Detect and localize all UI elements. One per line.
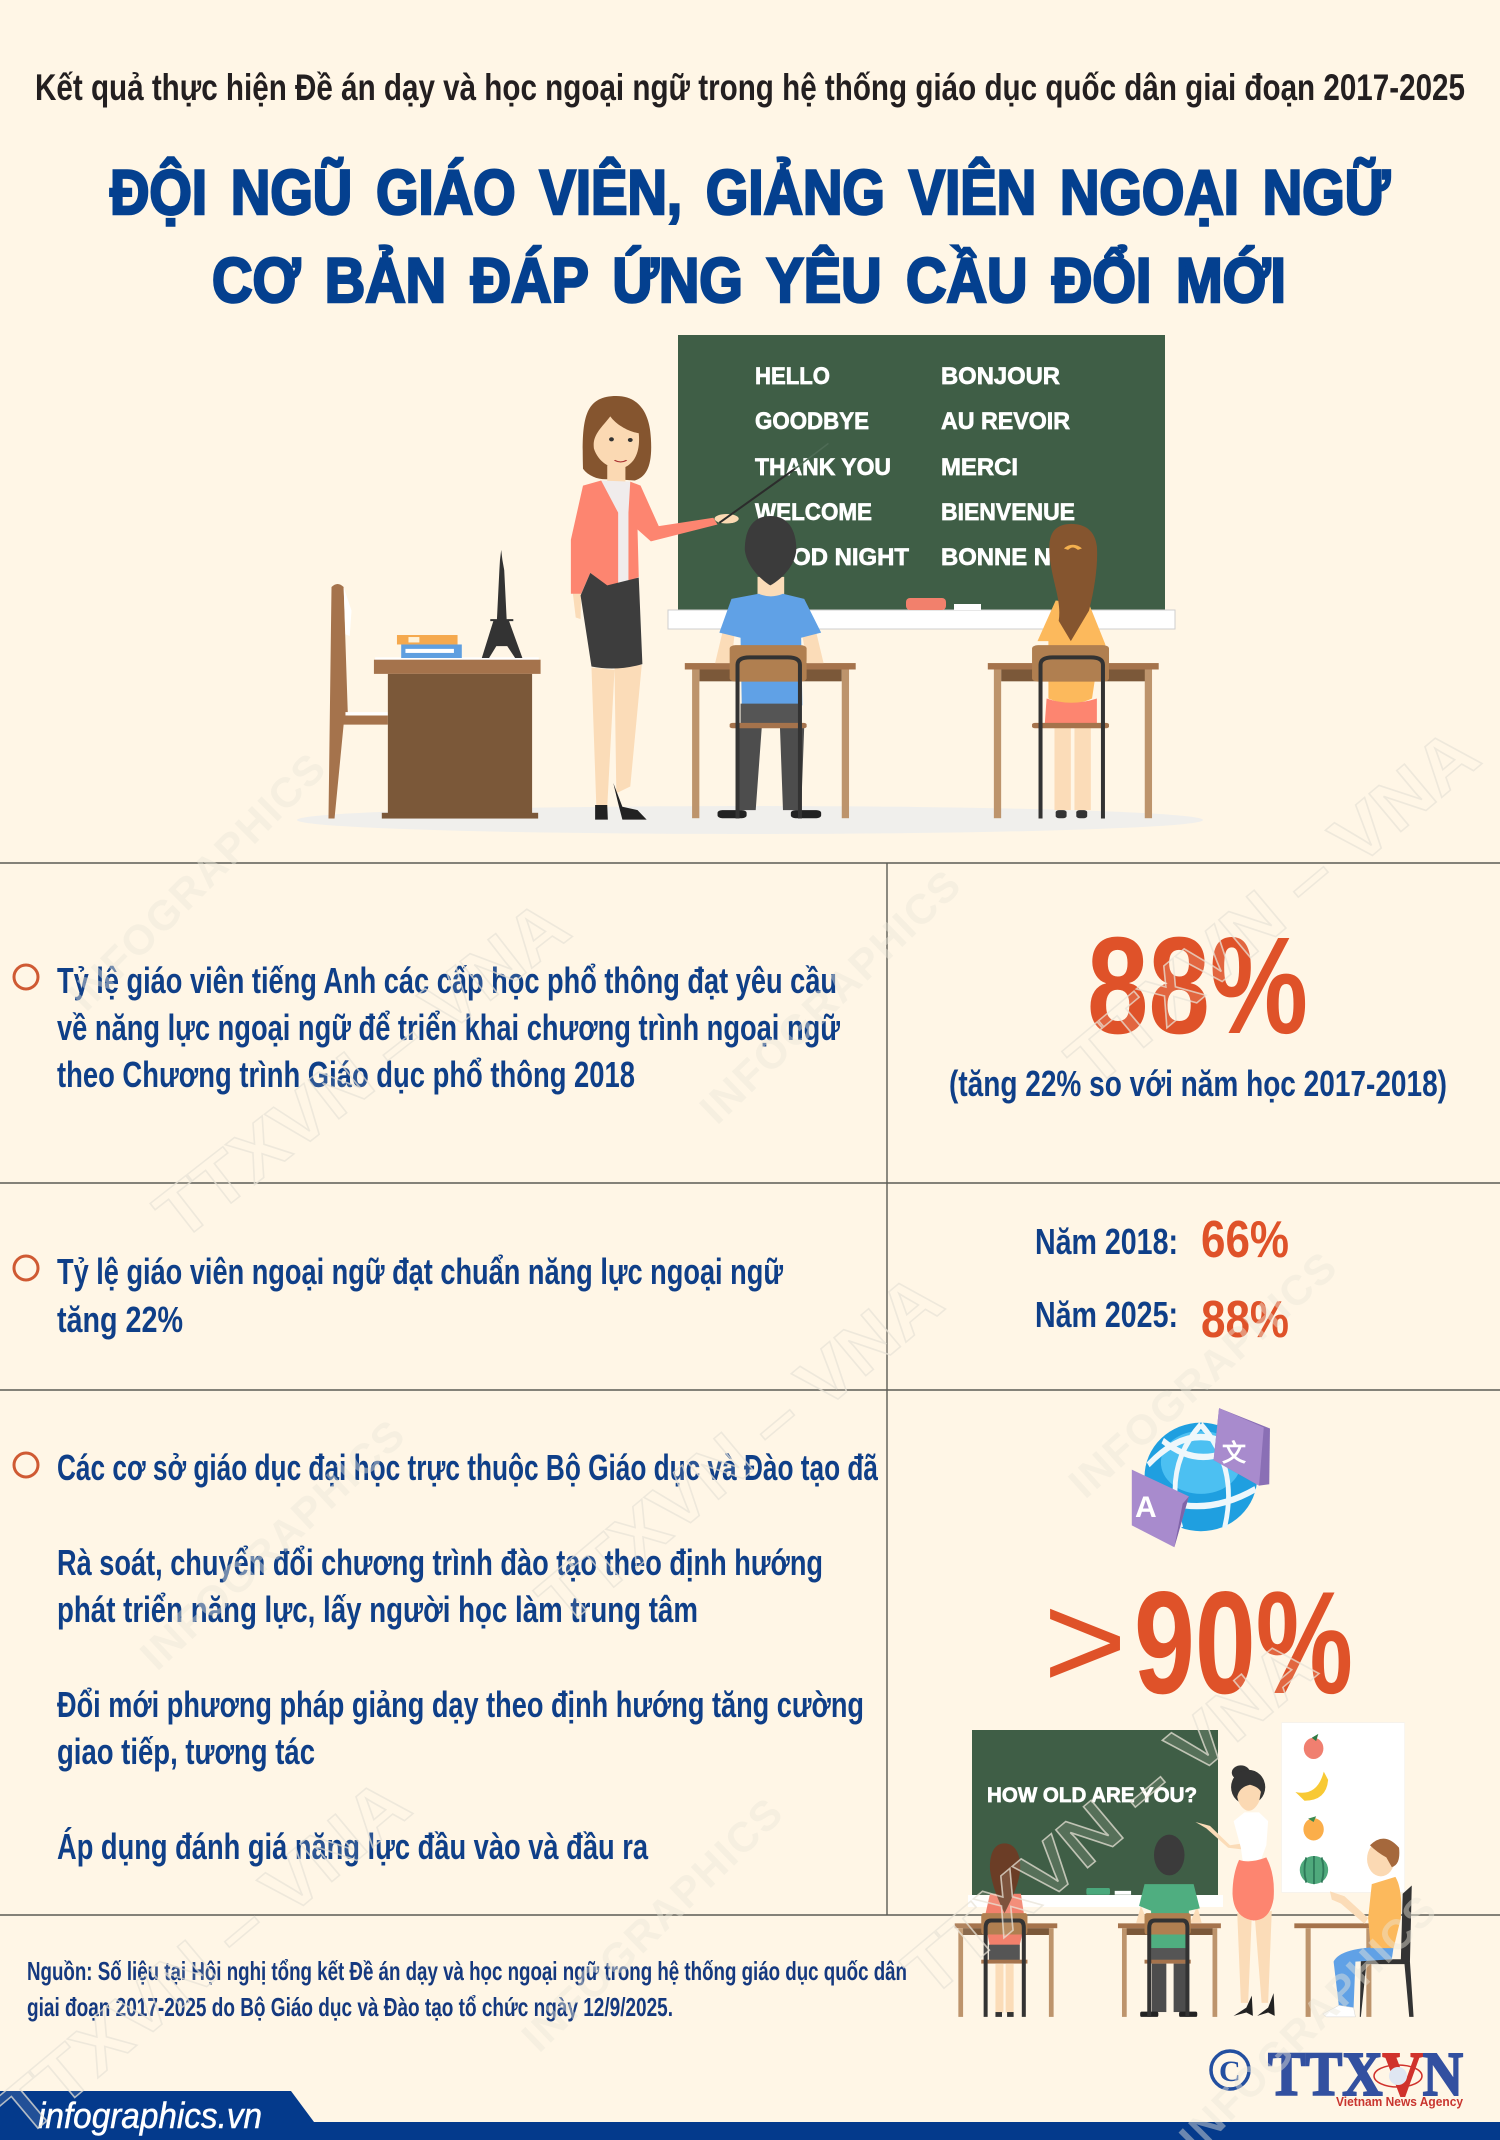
icon: translation globe: A [1135, 1491, 1157, 1524]
watermark: TTXVN – VNA [141, 885, 584, 1256]
row 1 text: về năng lực ngoại ngữ để triển khai chương trình ngoại ngữ [57, 1007, 841, 1048]
student girl [955, 1843, 1057, 2017]
watermark: INFOGRAPHICS [513, 1789, 791, 2060]
icon: translation globe [1132, 1408, 1270, 1547]
blackboard: HELLO [755, 363, 830, 390]
stat >90%: 90% [1134, 1561, 1353, 1724]
blackboard: MERCI [941, 454, 1018, 481]
student seated sideways [1294, 1839, 1414, 2017]
row 3 text: Đổi mới phương pháp giảng dạy theo định hướng tăng cường [57, 1684, 864, 1725]
row 3 text: giao tiếp, tương tác [57, 1731, 315, 1772]
row 3 text: phát triển năng lực, lấy người học làm trung tâm [57, 1589, 698, 1630]
bullet [14, 965, 38, 989]
source note: giai đoạn 2017-2025 do Bộ Giáo dục và Đào tạo tổ chức ngày 12/9/2025. [27, 1992, 673, 2022]
table grid lines [0, 863, 1500, 1915]
source note: Nguồn: Số liệu tại Hội nghị tổng kết Đề án dạy và học ngoại ngữ trong hệ thống giáo dục quốc dân [27, 1956, 907, 1986]
row 1 text: theo Chương trình Giáo dục phổ thông 2018 [57, 1054, 635, 1095]
logo: TTXVN: C [1219, 2055, 1241, 2088]
scene figures [328, 396, 1159, 820]
watermark: INFOGRAPHICS [691, 861, 969, 1132]
bullet [14, 1256, 38, 1280]
logo: TTXVN: Vietnam News Agency [1336, 2094, 1464, 2109]
teacher's desk and chair [328, 584, 541, 819]
source note [27, 1956, 907, 2022]
blackboard: BONNE N [941, 544, 1051, 571]
watermark: TTXVN – VNA [889, 1623, 1331, 2012]
year comparison: Năm 2025: [1035, 1294, 1178, 1335]
student boy at desk [685, 516, 856, 819]
blackboard: WELCOME [755, 499, 872, 526]
logo: TTXVN: TTXVN [1268, 2041, 1463, 2109]
watermark: INFOGRAPHICS [59, 744, 334, 1019]
student girl at desk [988, 524, 1159, 819]
main title [110, 157, 1391, 316]
stat >90% [1043, 1561, 1353, 1724]
footer band with website: infographics.vn [38, 2095, 262, 2136]
watermark: INFOGRAPHICS [1060, 1243, 1345, 1507]
main title: CƠ BẢN ĐÁP ỨNG YÊU CẦU ĐỔI MỚI [212, 245, 1286, 316]
blackboard: GOOD NIGHT [755, 544, 909, 571]
year comparison [1035, 1211, 1289, 1349]
watermark: TTXVN – VNA [1052, 713, 1494, 1102]
blackboard: GOODBYE [755, 408, 869, 435]
row 3 text: Áp dụng đánh giá năng lực đầu vào và đầu ra [57, 1826, 649, 1867]
blackboard 2 [968, 1730, 1223, 1907]
row 3 text: Rà soát, chuyển đổi chương trình đào tạo theo định hướng [57, 1542, 823, 1583]
bullet [14, 1453, 38, 1477]
blackboard: BIENVENUE [941, 499, 1075, 526]
teacher [571, 396, 828, 820]
blackboard: BONJOUR [941, 363, 1060, 390]
row 3: universities [14, 1447, 1353, 1867]
blackboard [668, 335, 1175, 629]
blackboard: THANK YOU [755, 454, 891, 481]
watermark: INFOGRAPHICS [131, 1411, 413, 1679]
row 1: English teachers [14, 909, 1447, 1104]
watermark: TTXVN – VNA [523, 1259, 957, 1641]
row 2 text: Tỷ lệ giáo viên ngoại ngữ đạt chuẩn năng lực ngoại ngữ [57, 1251, 784, 1292]
icon: Eiffel tower [482, 550, 522, 658]
row 1 text: Tỷ lệ giáo viên tiếng Anh các cấp học phổ thông đạt yêu cầu [57, 960, 837, 1001]
row 3 text: Các cơ sở giáo dục đại học trực thuộc Bộ Giáo dục và Đào tạo đã [57, 1447, 879, 1488]
row 1 text [57, 960, 841, 1095]
year comparison: Năm 2018: [1035, 1221, 1178, 1262]
student boy [1118, 1835, 1221, 2017]
stat >90%: > [1043, 1565, 1127, 1717]
blackboard: AU REVOIR [941, 408, 1070, 435]
blackboard 2: HOW OLD ARE YOU? [987, 1784, 1197, 1807]
footer band with website [0, 2091, 1500, 2140]
watermark [0, 713, 1494, 2140]
icon: translation globe: 文 [1222, 1439, 1247, 1467]
row 2 text [57, 1251, 784, 1340]
illustration: classroom with foreign language blackboard [297, 335, 1203, 834]
row 2: qualified teachers [14, 1211, 1289, 1349]
row 2 text: tăng 22% [57, 1299, 183, 1340]
stat 88%: 88% [1087, 909, 1308, 1063]
year comparison: 88% [1201, 1291, 1289, 1349]
fruit poster [1282, 1723, 1404, 1892]
illustration: class practising language [955, 1723, 1414, 2017]
teacher 2 [1195, 1765, 1275, 2016]
year comparison: 66% [1201, 1211, 1289, 1269]
row 3 text [57, 1447, 879, 1867]
